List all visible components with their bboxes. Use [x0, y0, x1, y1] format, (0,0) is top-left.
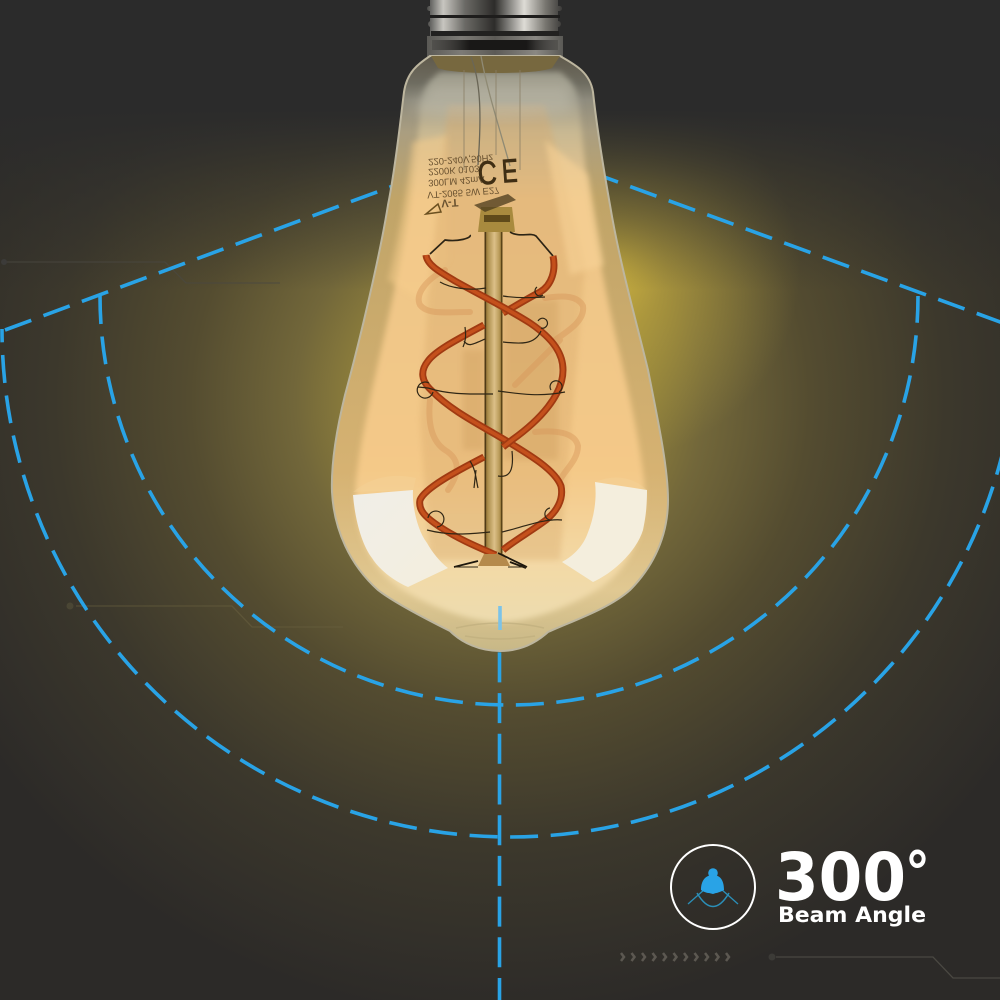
beam angle badge [671, 839, 930, 929]
filament strand upper behind stem [503, 256, 554, 313]
value: 300 degrees: 300 [775, 839, 906, 916]
value: 300 degrees: ° [905, 841, 930, 906]
filament strand first crossing [426, 255, 563, 447]
white crescent reflection left [353, 490, 448, 587]
white crescent reflection right [562, 482, 647, 582]
printed product text on glass: VT-2065 5W E27 [427, 184, 500, 200]
glass envelope [332, 56, 668, 651]
printed product text on glass: 300LM 42mA [428, 173, 486, 188]
gold neck press [431, 56, 560, 73]
decorative circuit lines and chevrons [1, 259, 1000, 978]
printed product text on glass: E [501, 152, 519, 190]
inner glass panels [353, 85, 647, 560]
filament base mount [454, 553, 527, 568]
lead-in wires [464, 56, 520, 170]
outer beam arc [2, 329, 1000, 837]
icon: bulb with beam angle [671, 845, 755, 929]
printed product text on glass: 220-240V,50Hz [428, 151, 494, 167]
filament strand bottom loop [420, 457, 496, 555]
vertical axis dashed line [498, 560, 501, 1000]
light bulb [332, 0, 668, 651]
glass tip detail [456, 623, 544, 639]
central glass stem [484, 215, 502, 560]
glass inner glow [355, 72, 645, 622]
right beam line [585, 170, 1000, 323]
left beam line [5, 176, 420, 330]
printed product text on glass: V-T [441, 196, 459, 209]
faint axis dash seen through glass [498, 606, 502, 630]
filament strand lower in front of stem [423, 325, 562, 550]
inner beam arc [100, 296, 918, 705]
stem press and top wire supports [430, 194, 553, 256]
printed product text on glass [426, 151, 519, 214]
printed product text on glass: C [477, 154, 498, 192]
spiral LED filament [420, 255, 563, 555]
filament support wires [417, 282, 565, 534]
screw thread base [427, 0, 563, 58]
printed product text on glass: 2200K 0103 [428, 162, 480, 177]
label: Beam Angle: Beam Angle [778, 903, 926, 928]
ghost filament reflections [419, 270, 583, 490]
